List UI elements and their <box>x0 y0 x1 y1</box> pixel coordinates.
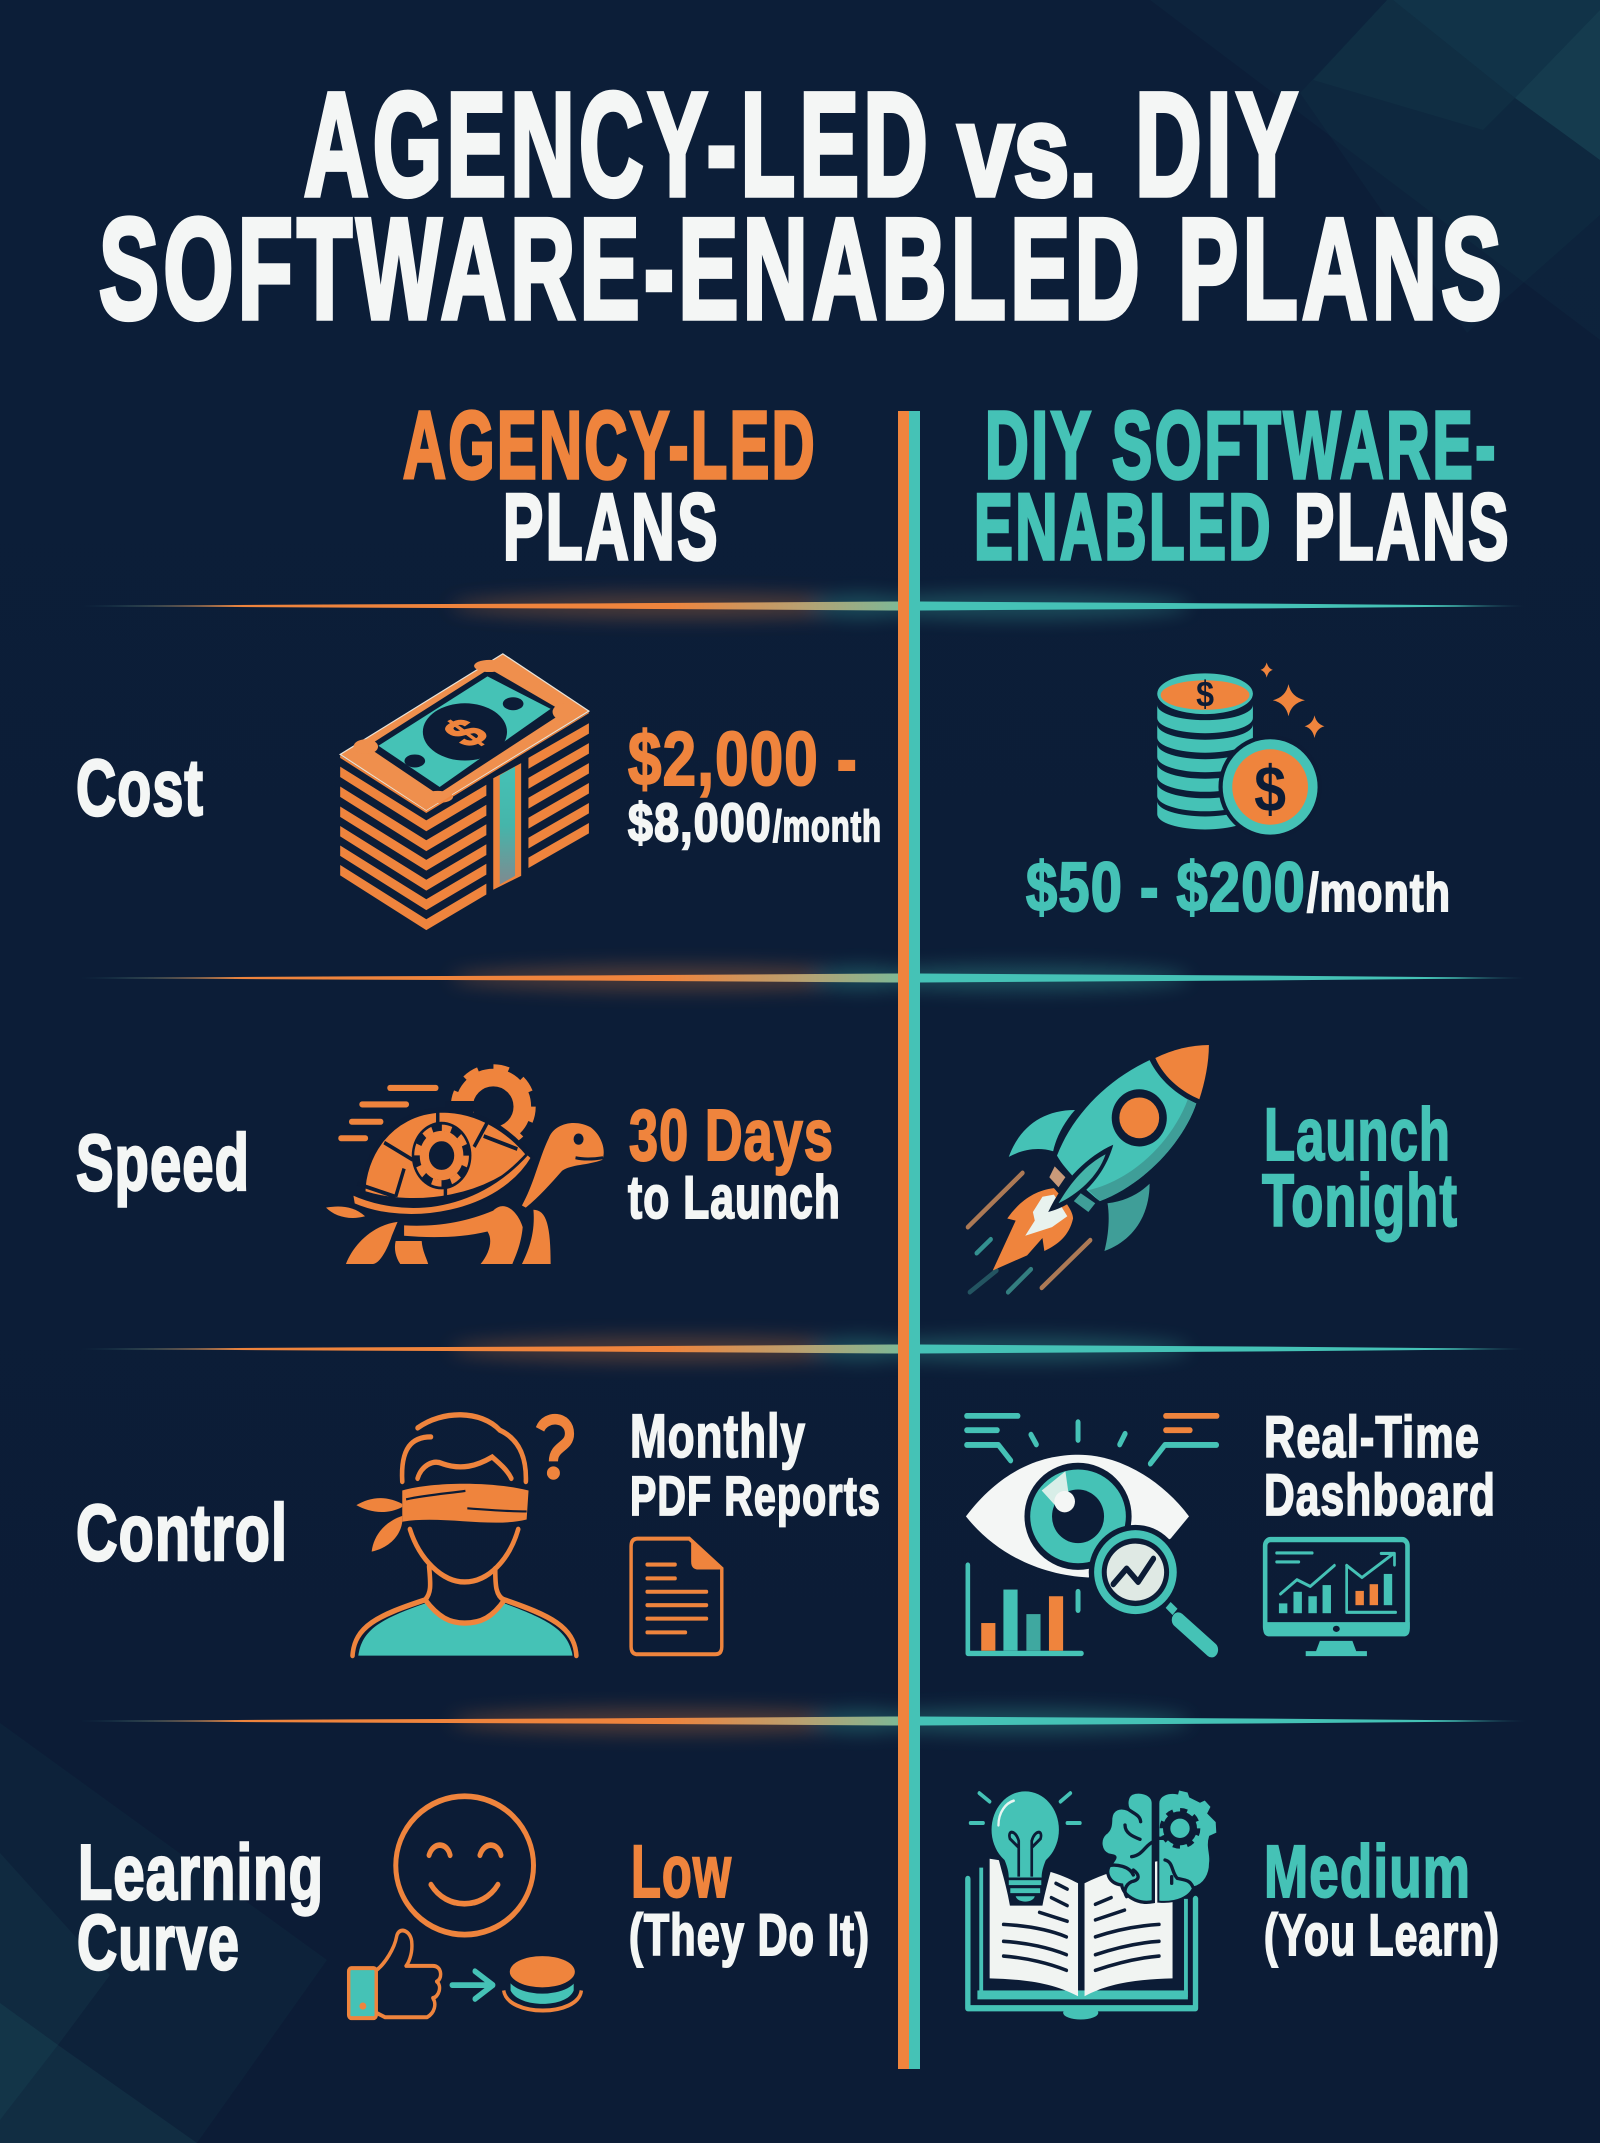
icon: stack of cash: $ <box>431 710 501 756</box>
value: agency cost: /month <box>773 802 882 851</box>
value: real-time dashboard <box>1264 1405 1496 1528</box>
icon: eye with magnifier <box>966 1416 1217 1653</box>
value: launch tonight: Launch <box>1264 1093 1451 1176</box>
value: low, they do it: (They Do It) <box>629 1903 870 1968</box>
title: AGENCY-LED <box>304 63 932 227</box>
column heading: agency-led plans: PLANS <box>503 474 720 579</box>
icon: turtle with gears <box>326 1068 604 1264</box>
title <box>99 63 1506 349</box>
column heading: DIY software-enabled plans <box>974 392 1511 579</box>
title: vs. <box>958 77 1097 223</box>
icon: rocket <box>968 1045 1209 1292</box>
value: monthly PDF reports: Monthly <box>630 1402 806 1470</box>
row label: control: Control <box>76 1488 288 1577</box>
icon: coin stack <box>1157 662 1324 839</box>
title: DIY <box>1135 63 1302 227</box>
panel: cost row <box>76 654 1451 930</box>
value: real-time dashboard: Real-Time <box>1264 1405 1480 1470</box>
icon: coin stack: $ <box>1254 751 1286 825</box>
value: DIY cost: /month <box>1307 863 1451 923</box>
value: medium, you learn: (You Learn) <box>1264 1903 1500 1968</box>
value: monthly PDF reports: PDF Reports <box>630 1464 881 1527</box>
value: medium, you learn: Medium <box>1264 1830 1471 1913</box>
center vertical divider <box>898 411 920 2069</box>
icon: blindfolded person <box>353 1415 576 1656</box>
value: agency cost: $8,000 <box>628 793 772 853</box>
column heading: agency-led plans: AGENCY-LED <box>403 392 817 499</box>
column heading: agency-led plans <box>403 392 817 579</box>
column heading: DIY software-enabled plans: ENABLED <box>974 474 1273 579</box>
row label: learning curve: Curve <box>77 1898 240 1986</box>
value: launch tonight: Tonight <box>1262 1159 1458 1242</box>
icon: dashboard monitor <box>1263 1540 1410 1656</box>
panel: learning curve row <box>77 1789 1500 2019</box>
row label: cost: Cost <box>76 743 204 832</box>
row label: speed: Speed <box>76 1118 250 1207</box>
value: low, they do it <box>629 1830 870 1968</box>
value: launch tonight <box>1262 1093 1458 1242</box>
row dividers with glow <box>80 593 1530 1734</box>
icon: document <box>631 1539 722 1654</box>
icon: stack of cash <box>340 654 589 930</box>
value: agency cost: $2,000 - <box>628 717 858 802</box>
icon: coin stack: $ <box>1196 675 1214 715</box>
value: 30 days to launch: 30 Days <box>629 1096 834 1176</box>
value: agency cost <box>628 717 882 853</box>
value: 30 days to launch: to Launch <box>628 1164 841 1231</box>
icon: book, light bulb and brain <box>968 1789 1217 2019</box>
value: DIY cost: $50 - $200 <box>1026 848 1306 926</box>
value: 30 days to launch <box>628 1096 841 1231</box>
panel: control row <box>76 1402 1496 1656</box>
value: monthly PDF reports <box>630 1402 881 1527</box>
icon: smiley, thumbs up and button <box>349 1796 581 2018</box>
value: medium, you learn <box>1264 1830 1500 1968</box>
row label: learning curve <box>77 1828 324 1986</box>
value: real-time dashboard: Dashboard <box>1264 1463 1496 1528</box>
value: low, they do it: Low <box>631 1830 732 1913</box>
panel: speed row <box>76 1045 1458 1292</box>
row label: learning curve: Learning <box>78 1828 324 1916</box>
